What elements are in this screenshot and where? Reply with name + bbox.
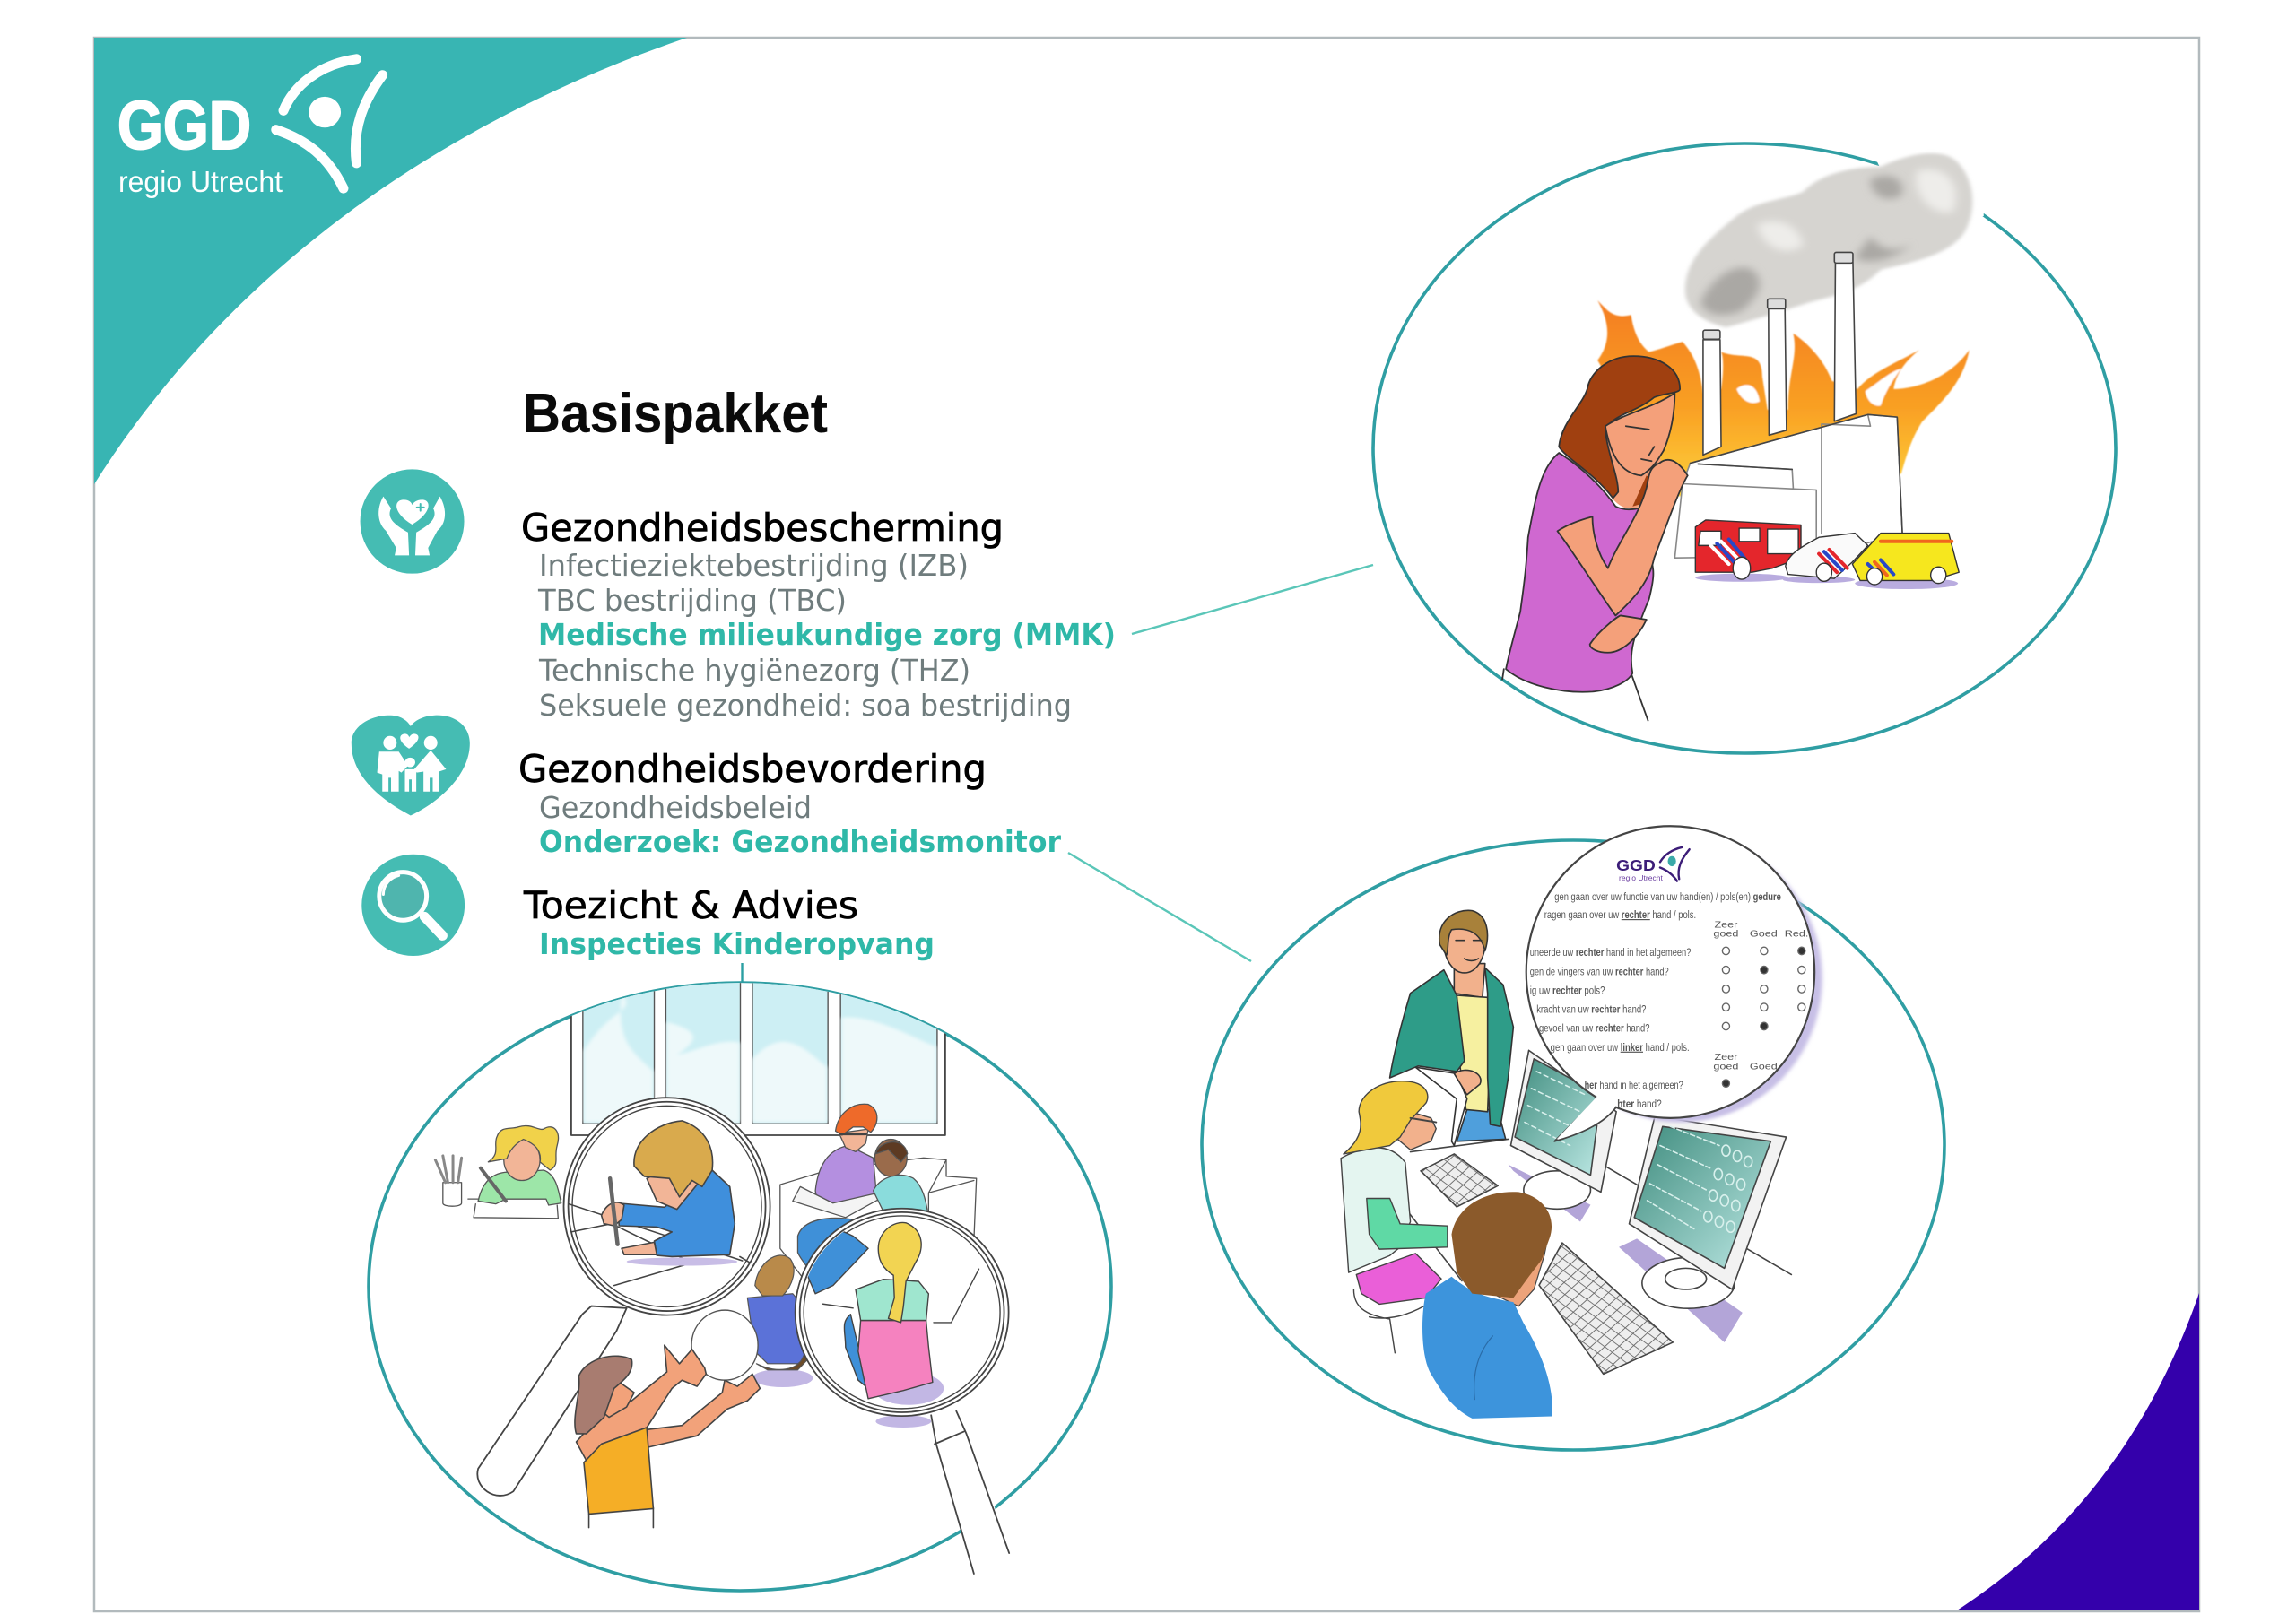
item: Medische milieukundige zorg: Medische milieukundige zorg (MMK): [538, 617, 1116, 652]
logo region name: regio Utrecht: [118, 165, 283, 198]
GGD regio Utrecht logo: [117, 59, 383, 198]
item: Infectieziektebestrijding: Infectieziektebestrijding (IZB): [539, 548, 969, 583]
survey speech bubble: goed: [1713, 929, 1738, 939]
panel: childcare inspection scene: [369, 981, 1111, 1591]
fire engine: [1695, 520, 1801, 579]
teal corner panel: [94, 38, 687, 484]
survey speech bubble: uneerde uw rechter hand in het algemeen?: [1530, 946, 1691, 959]
teacher: [1390, 910, 1513, 1146]
heading: Gezondheidsbevordering: Gezondheidsbevordering: [518, 747, 987, 791]
scene circle: [369, 983, 1111, 1591]
heading: Gezondheidsbescherming: Gezondheidsbescherming: [521, 506, 1004, 550]
item: TBC bestrijding: TBC bestrijding (TBC): [537, 583, 847, 618]
monitor 1: [1510, 1050, 1616, 1209]
survey radio buttons: [1722, 947, 1805, 1087]
survey speech bubble: goed: [1713, 1062, 1738, 1072]
item: Technische hygienezorg: Technische hygiënezorg (THZ): [538, 653, 970, 688]
survey speech bubble: hter hand?: [1617, 1098, 1662, 1110]
survey speech bubble: Goed: [1750, 929, 1778, 939]
magnifier 2 lens with braided girl: [796, 1209, 1009, 1416]
police car: [1786, 534, 1868, 581]
panel: factory fire scene: [1373, 143, 2116, 753]
ambulance: [1852, 534, 1959, 585]
woman coughing: [1502, 356, 1688, 721]
scene circle: [1373, 143, 2116, 753]
magnifier 1 lens with drawing boy: [564, 1098, 770, 1315]
monitor 2: [1630, 1115, 1787, 1308]
keyboards: [1421, 1154, 1673, 1374]
survey speech bubble: gen de vingers van uw rechter hand?: [1530, 966, 1669, 977]
boy from behind: [1422, 1192, 1552, 1419]
girl with ball: [575, 1345, 760, 1528]
vehicle shadows: [1695, 574, 1788, 582]
survey speech bubble: Red.: [1785, 929, 1808, 939]
windows: [571, 981, 945, 1135]
icon: magnifying glass: [361, 855, 465, 956]
purple corner panel: [1957, 1293, 2199, 1610]
survey logo: GGD: [1616, 857, 1656, 874]
survey speech bubble: regio Utrecht: [1619, 874, 1663, 883]
logo wordmark: GGD: [117, 88, 251, 164]
survey column headings: Zeer: [1714, 920, 1738, 930]
survey speech bubble: ragen gaan over uw rechter hand / pols.: [1544, 908, 1696, 921]
survey speech bubble: gevoel van uw rechter hand?: [1539, 1022, 1649, 1034]
reading woman with child on sofa: [780, 1104, 977, 1323]
item: Inspecties Kinderopvang: Inspecties Kinderopvang: [539, 926, 935, 961]
survey speech bubble: her hand in het algemeen?: [1585, 1079, 1683, 1091]
logo figure: [276, 59, 383, 188]
item: Onderzoek Gezondheidsmonitor: Onderzoek: Gezondheidsmonitor: [539, 824, 1062, 859]
girl with glasses: [1341, 1081, 1448, 1353]
scene circle: [1202, 840, 1944, 1450]
magnifier 1 handle: [477, 1306, 627, 1496]
desk lines and shadows: [1509, 1165, 1743, 1342]
heading: Toezicht en Advies: Toezicht & Advies: [523, 883, 858, 927]
magnifier 2 handle: [875, 1411, 1009, 1574]
item: Gezondheidsbeleid: Gezondheidsbeleid: [539, 790, 812, 825]
connector: inspections to childcare scene: [741, 963, 744, 983]
title: Basispakket: [523, 383, 828, 445]
icon: hands holding heart: [361, 469, 465, 574]
survey speech bubble: [1526, 826, 1822, 1141]
seated child from behind: [747, 1255, 818, 1387]
factory building: [1674, 414, 1902, 558]
chimneys: [1703, 252, 1856, 455]
survey questions: gen gaan over uw functie van uw hand(en) / pols(en) gedure: [1554, 890, 1781, 903]
smoke cloud: [1685, 151, 1984, 327]
icon: family in heart: [352, 716, 470, 815]
survey speech bubble: Goed: [1750, 1062, 1778, 1072]
survey speech bubble: ig uw rechter pols?: [1530, 985, 1605, 996]
flames: [1597, 300, 1970, 496]
connector: monitor to computer scene: [1068, 853, 1251, 961]
ball: [691, 1310, 758, 1380]
connector: MMK to factory scene: [1132, 565, 1373, 634]
panel: computer survey scene: [1202, 826, 1944, 1450]
survey speech bubble: gen gaan over uw linker hand / pols.: [1551, 1041, 1690, 1054]
survey speech bubble: kracht van uw rechter hand?: [1536, 1003, 1646, 1015]
girl drawing at table: [435, 1125, 561, 1219]
survey speech bubble: Zeer: [1714, 1053, 1738, 1063]
item: Seksuele gezondheid: Seksuele gezondheid: soa bestrijding: [539, 688, 1072, 723]
